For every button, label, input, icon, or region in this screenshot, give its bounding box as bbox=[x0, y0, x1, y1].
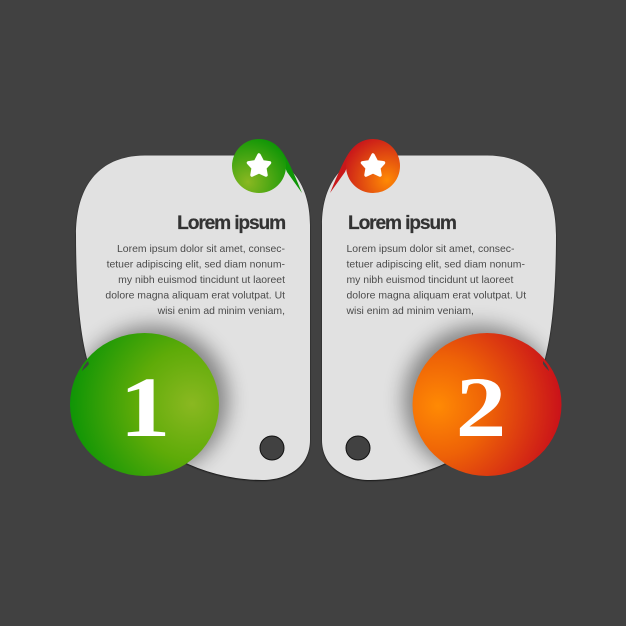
text block: card 2: my nibh euismod tincidunt ut laoreet bbox=[346, 275, 513, 286]
shadow: orange number circle bbox=[404, 326, 556, 474]
badge: red star bbox=[330, 139, 400, 193]
panel: card 2 bbox=[322, 156, 556, 481]
badge: green number 1 bbox=[70, 333, 219, 476]
hole: card 1 bbox=[260, 436, 284, 460]
heading: card 2: Lorem ipsum bbox=[348, 213, 456, 234]
hole: card 2 bbox=[346, 436, 370, 460]
text block: card 1: wisi enim ad minim veniam, bbox=[157, 306, 285, 317]
badge: orange number 2: 2 bbox=[456, 360, 506, 455]
shadow: green number circle bbox=[76, 326, 228, 474]
text block: card 2: Lorem ipsum dolor sit amet, consec- bbox=[346, 244, 514, 255]
text block: card 2: dolore magna aliquam erat volutpat. Ut bbox=[346, 290, 526, 302]
badge: orange number 2 bbox=[412, 333, 562, 476]
icon: star bbox=[362, 155, 384, 175]
text block: card 1: my nibh euismod tincidunt ut laoreet bbox=[118, 275, 285, 286]
text block: card 1: Lorem ipsum dolor sit amet, consec- bbox=[117, 244, 285, 255]
icon: star bbox=[248, 155, 270, 175]
text block: card 1: tetuer adipiscing elit, sed diam nonum- bbox=[107, 260, 285, 270]
text block: card 1: dolore magna aliquam erat volutpat. Ut bbox=[105, 290, 285, 302]
text block: card 2 bbox=[346, 244, 526, 317]
heading: card 1: Lorem ipsum bbox=[177, 213, 285, 234]
text block: card 1 bbox=[105, 244, 285, 317]
badge: green star bbox=[232, 139, 302, 193]
text block: card 2: tetuer adipiscing elit, sed diam nonum- bbox=[346, 260, 525, 270]
badge: green number 1: 1 bbox=[120, 360, 170, 455]
text block: card 2: wisi enim ad minim veniam, bbox=[346, 306, 474, 317]
panel: card 1 bbox=[76, 156, 310, 481]
